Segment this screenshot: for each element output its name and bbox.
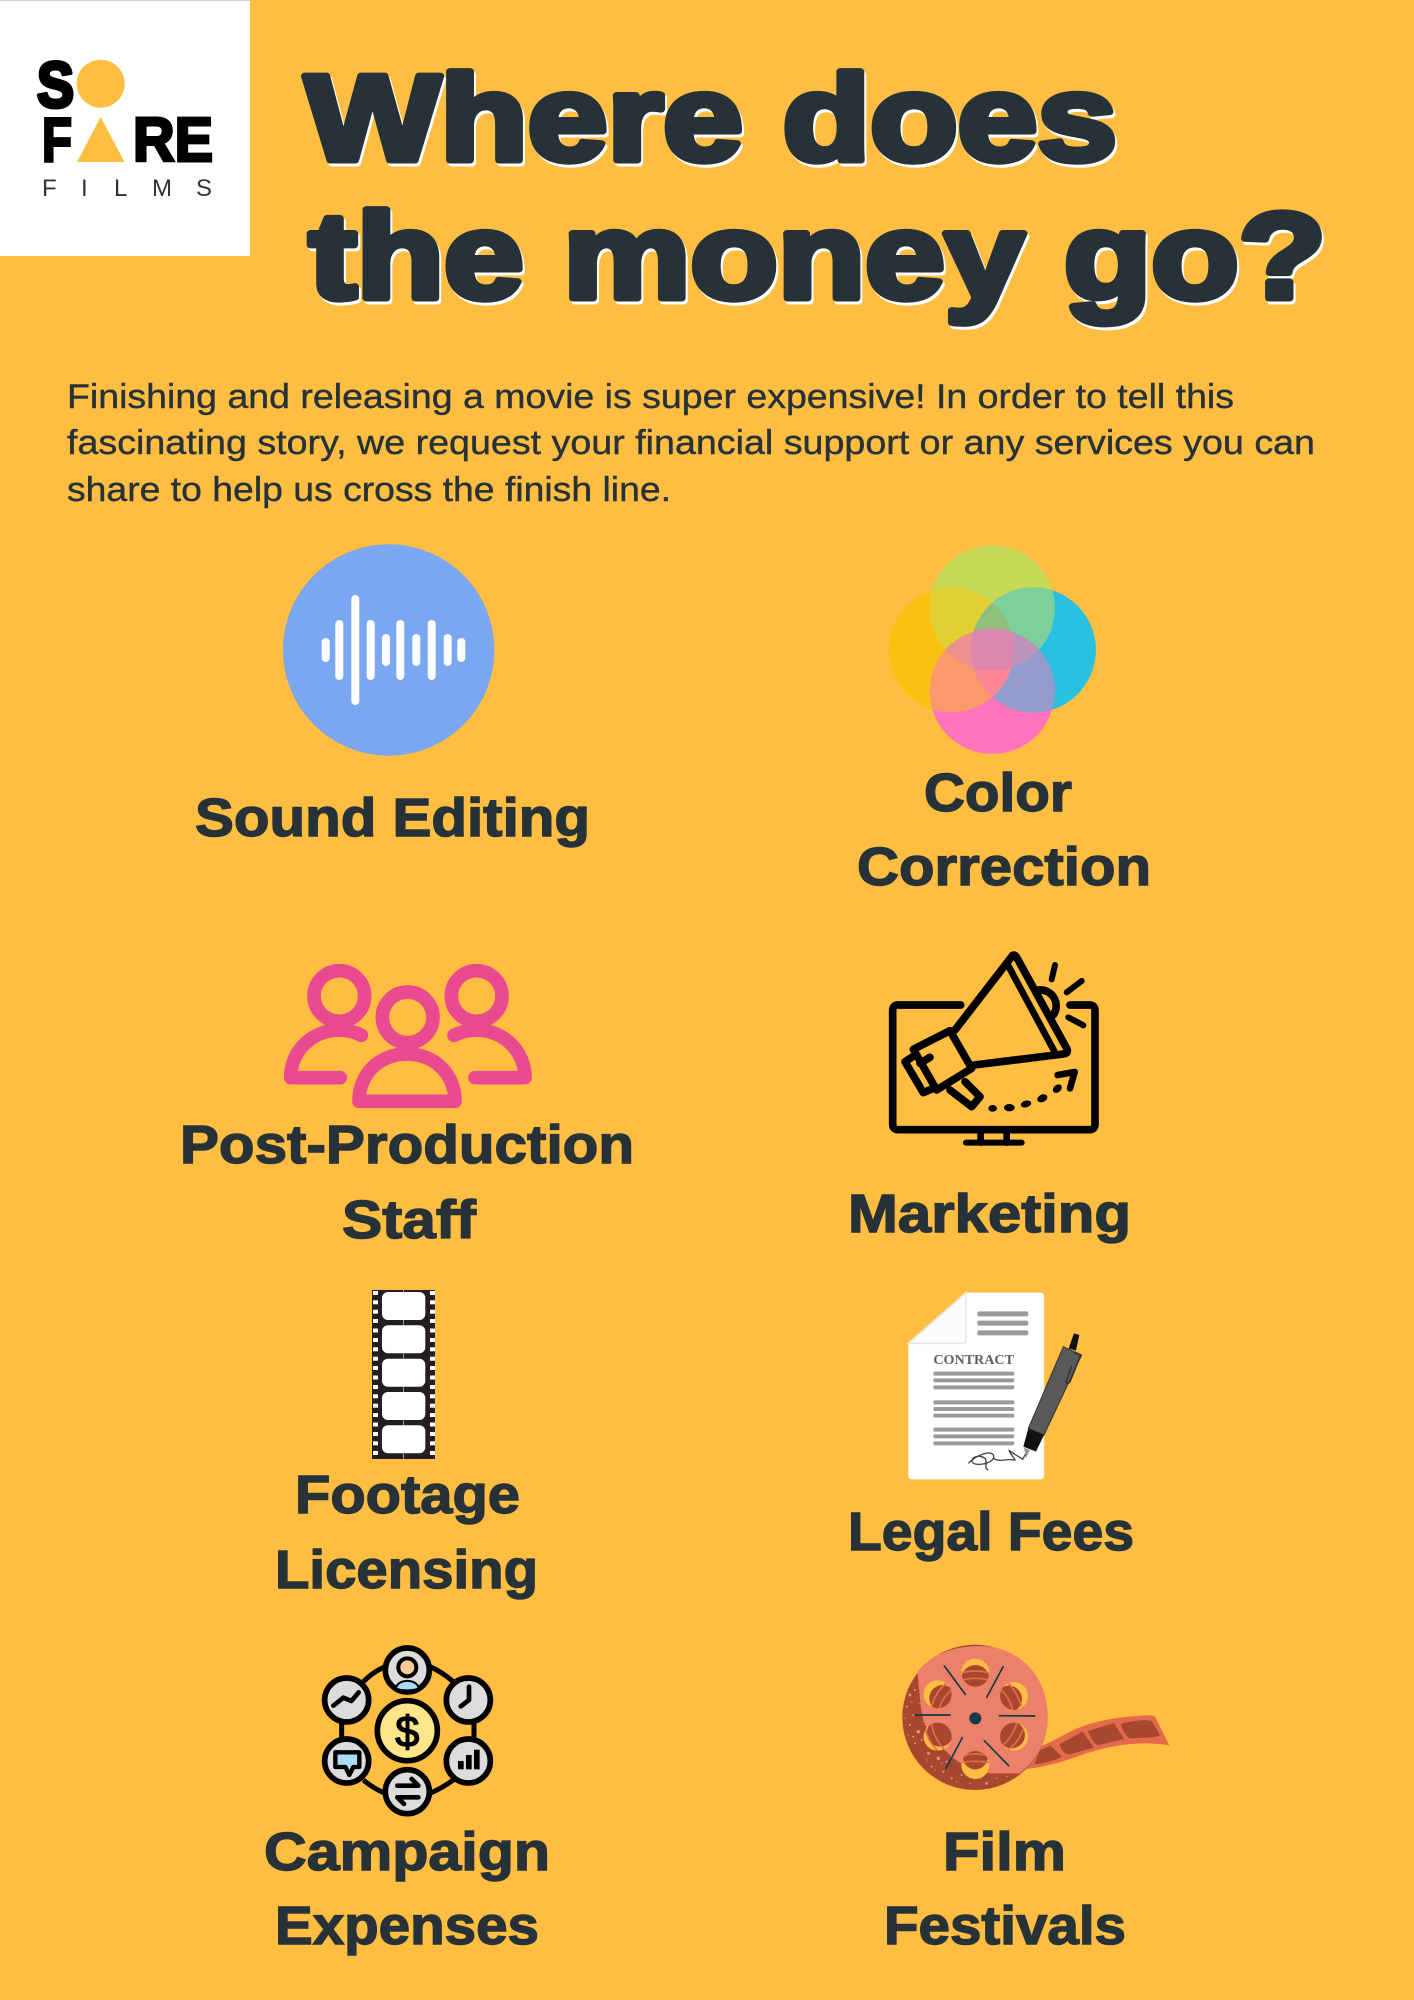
label: Footage Licensing [275, 1465, 538, 1600]
icon: contract and pen: CONTRACT [933, 1352, 1014, 1367]
logo: So Fare Films: S [37, 49, 74, 121]
label: Color Correction: Correction [857, 837, 1151, 897]
intro paragraph [67, 378, 1315, 509]
icon: money network: $ [395, 1709, 419, 1757]
icon: money network [325, 1648, 490, 1814]
title [305, 50, 1328, 327]
title: Where does [305, 50, 1117, 186]
title: the money go? [309, 188, 1326, 324]
label: Legal Fees: Legal Fees [848, 1502, 1134, 1562]
item: film festivals [884, 1645, 1169, 1956]
item: marketing [848, 955, 1131, 1244]
title: the money go? [311, 191, 1328, 327]
label: Film Festivals: Film [943, 1822, 1066, 1882]
label: Campaign Expenses: Expenses [275, 1896, 539, 1956]
icon: sound wave [283, 544, 494, 756]
intro paragraph: share to help us cross the finish line. [67, 471, 671, 509]
logo: So Fare Films: FILMS [42, 175, 212, 202]
label: Campaign Expenses: Campaign [264, 1822, 550, 1882]
item: footage licensing [275, 1290, 538, 1600]
item: campaign expenses [264, 1648, 550, 1956]
label: Footage Licensing: Licensing [275, 1540, 538, 1600]
intro paragraph: Finishing and releasing a movie is super expensive! In order to tell this [67, 378, 1234, 416]
item: sound editing [195, 544, 590, 848]
label: Film Festivals [884, 1822, 1126, 1956]
item: legal fees [848, 1293, 1134, 1562]
label: Footage Licensing: Footage [295, 1465, 520, 1525]
icon: film strip [372, 1290, 435, 1459]
item: color correction [857, 545, 1151, 897]
label: Film Festivals: Festivals [884, 1896, 1126, 1956]
icon: overlapping colour circles [889, 545, 1096, 754]
icon: three people [291, 971, 525, 1101]
item: post-production staff [180, 971, 634, 1250]
logo: So Fare Films [0, 0, 250, 256]
label: Post-Production Staff [180, 1115, 634, 1250]
title: Where does [307, 53, 1119, 189]
icon: megaphone on monitor [893, 955, 1095, 1143]
label: Color Correction [857, 763, 1151, 897]
label: Sound Editing: Sound Editing [195, 788, 590, 848]
label: Campaign Expenses [264, 1822, 550, 1956]
label: Post-Production Staff: Staff [342, 1190, 477, 1250]
label: Post-Production Staff: Post-Production [180, 1115, 634, 1175]
logo: So Fare Films: RE [133, 106, 213, 175]
icon: film reel [902, 1645, 1169, 1790]
label: Color Correction: Color [924, 763, 1072, 823]
logo: So Fare Films: F [42, 106, 72, 175]
icon: contract and pen [908, 1293, 1082, 1479]
intro paragraph: fascinating story, we request your financial support or any services you can [67, 424, 1315, 462]
label: Marketing: Marketing [848, 1184, 1131, 1244]
